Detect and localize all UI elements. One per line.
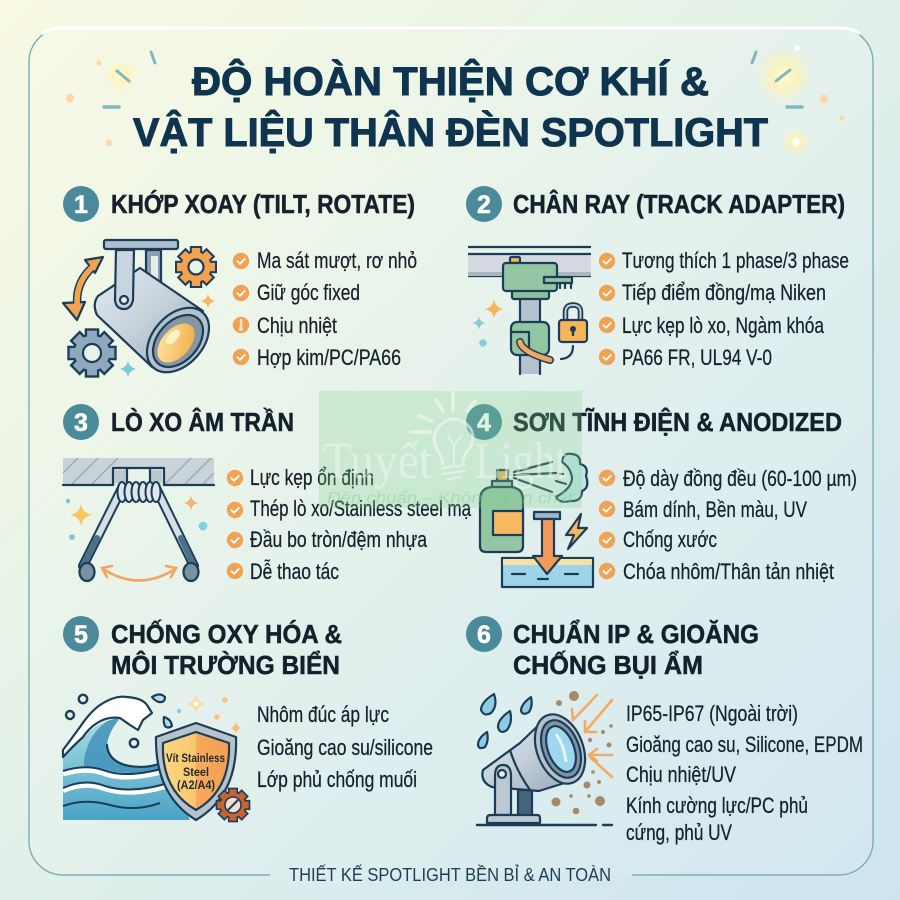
bullet list 4 <box>599 466 857 584</box>
bullet list 4: Bám dính, Bền màu, UV <box>623 497 807 522</box>
heading 4: SƠN TĨNH ĐIỆN & ANODIZED <box>513 407 842 437</box>
heading 3: LÒ XO ÂM TRẦN <box>111 407 294 437</box>
bullet list 4: Chống xước <box>623 527 717 552</box>
watermark <box>319 391 582 508</box>
panel: 3 recessed spring <box>63 404 472 584</box>
bullet list 3: Lực kẹp ổn định <box>250 465 374 490</box>
panel: 6 IP rating and gasket <box>466 616 863 845</box>
icon: wave and shield: Steel <box>183 767 209 779</box>
heading 6 <box>466 616 759 680</box>
text list 5: Nhôm đúc áp lực <box>257 702 389 727</box>
panel: 2 track adapter <box>466 186 849 374</box>
bullet list 3: Đầu bo tròn/đệm nhựa <box>250 527 428 552</box>
heading 6: 6 <box>477 621 491 649</box>
watermark: Tuyết <box>323 433 432 490</box>
text list 6: IP65-IP67 (Ngoài trời) <box>626 701 798 726</box>
watermark: Đèn chuẩn – Không gian chất <box>327 489 574 507</box>
watermark: Light <box>475 433 567 490</box>
text list 6: Chịu nhiệt/UV <box>626 762 736 787</box>
heading 4: 4 <box>477 409 491 437</box>
bullet list 4: Chóa nhôm/Thân tản nhiệt <box>623 559 834 584</box>
heading 5: MÔI TRƯỜNG BIỂN <box>111 650 340 680</box>
text list 5 <box>257 702 433 792</box>
heading 1: 1 <box>74 191 88 219</box>
panel: 5 oxidation and marine <box>63 616 433 822</box>
heading 2: CHÂN RAY (TRACK ADAPTER) <box>513 189 845 219</box>
bullet list 1: Giữ góc fixed <box>257 280 360 305</box>
text list 5: Gioăng cao su/silicone <box>257 735 433 760</box>
icon: spray can and coating <box>480 454 593 587</box>
bullet list 1 <box>233 248 417 370</box>
title <box>133 58 768 155</box>
panel: 4 powder coat and anodized <box>466 404 857 587</box>
heading 1: KHỚP XOAY (TILT, ROTATE) <box>111 189 415 219</box>
title decorations <box>66 46 844 156</box>
bullet list 3: Thép lò xo/Stainless steel mạ <box>250 496 472 521</box>
bullet list 2: PA66 FR, UL94 V-0 <box>622 345 772 370</box>
footer: THIẾT KẾ SPOTLIGHT BỀN BỈ & AN TOÀN <box>289 864 611 885</box>
text list 6: Kính cường lực/PC phủ <box>626 793 808 818</box>
heading 6: CHỐNG BỤI ẨM <box>513 650 703 680</box>
bullet list 2 <box>599 248 849 370</box>
title: ĐỘ HOÀN THIỆN CƠ KHÍ & <box>192 58 709 104</box>
heading 5: 5 <box>74 621 88 649</box>
bullet list 1: Chịu nhiệt <box>257 313 337 338</box>
bullet list 2: Tiếp điểm đồng/mạ Niken <box>622 280 826 305</box>
icon: wave and shield: (A2/A4) <box>177 780 215 792</box>
panel: 1 swivel joint <box>63 186 417 384</box>
heading 5: CHỐNG OXY HÓA & <box>111 619 342 649</box>
heading 2 <box>466 186 845 222</box>
bullet list 3: Dễ thao tác <box>250 559 339 584</box>
heading 2: 2 <box>477 191 491 219</box>
bullet list 3 <box>227 465 472 584</box>
icon: wave and shield: Vít Stainless <box>166 753 225 765</box>
bullet list 2: Lực kẹp lò xo, Ngàm khóa <box>622 313 825 338</box>
bullet list 1: Hợp kim/PC/PA66 <box>257 345 401 370</box>
heading 4 <box>466 404 842 440</box>
heading 6: CHUẨN IP & GIOĂNG <box>513 619 759 649</box>
icon: spotlight on swivel joint <box>63 240 221 384</box>
heading 1 <box>63 186 415 222</box>
text list 6: cứng, phủ UV <box>626 820 732 845</box>
text list 6 <box>626 701 863 845</box>
bullet list 1: Ma sát mượt, rơ nhỏ <box>257 248 417 273</box>
icon: wave and shield <box>63 694 250 822</box>
icon: ceiling spring clip <box>63 458 214 581</box>
heading 5 <box>63 616 342 680</box>
icon: track adapter with lock <box>468 247 591 374</box>
heading 3: 3 <box>74 409 88 437</box>
icon: waterproof spotlight <box>477 691 613 825</box>
title: VẬT LIỆU THÂN ĐÈN SPOTLIGHT <box>133 109 768 155</box>
heading 3 <box>63 404 294 440</box>
text list 5: Lớp phủ chống muối <box>257 767 417 792</box>
